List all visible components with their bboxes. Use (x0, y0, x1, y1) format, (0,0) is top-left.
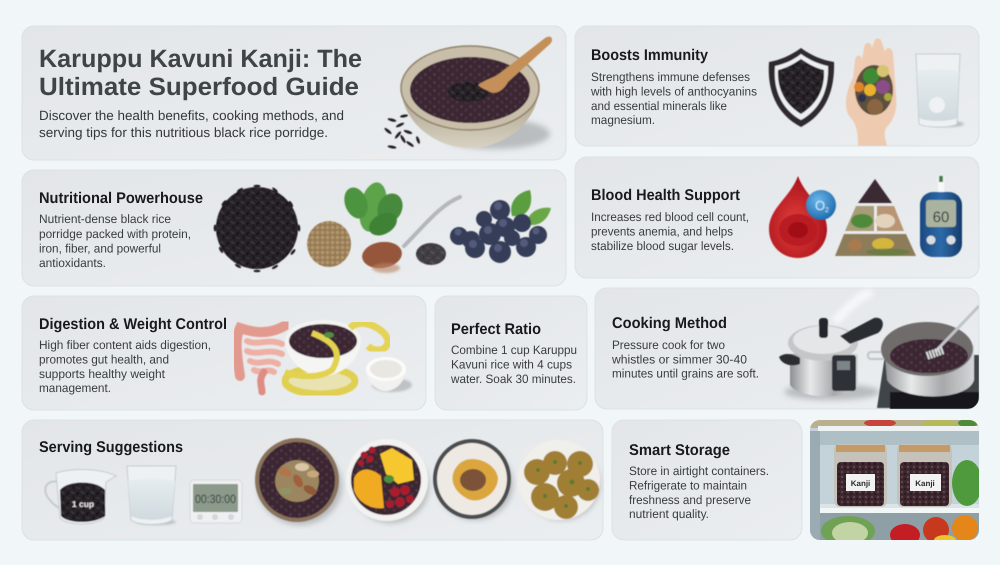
icon: bowl with mango and pomegranate (346, 439, 429, 523)
icon: oxygen bubble: 2 (825, 207, 829, 214)
icon: pressure cooker (779, 292, 883, 400)
icon: glass of water (127, 466, 176, 525)
body text: minutes until grains are soft. (612, 366, 759, 380)
body text (611, 338, 759, 380)
body text (39, 212, 191, 270)
body text (450, 343, 577, 386)
body text (591, 210, 749, 253)
icon: rice shield (769, 48, 834, 127)
body text: Combine 1 cup Karuppu (451, 343, 577, 357)
icon: left kanji jar (834, 444, 887, 507)
body text: Kavuni rice with 4 cups (451, 358, 572, 372)
heading: Digestion & Weight Control (39, 316, 227, 333)
body text: iron, fiber, and powerful (39, 242, 161, 256)
heading: Blood Health Support (591, 187, 740, 204)
title: Karuppu Kavuni Kanji: The (39, 45, 362, 73)
icon: hand holding foods (846, 38, 896, 146)
icon: oxygen bubble: O (815, 198, 825, 213)
icon: digital timer (190, 480, 242, 523)
icon: measuring cup with rice (45, 470, 116, 524)
panel: serving suggestions (22, 420, 603, 540)
panel: perfect ratio (435, 296, 587, 410)
panel: blood health support (575, 157, 979, 278)
icon: plate of patties (518, 440, 600, 520)
heading: Serving Suggestions (39, 439, 183, 456)
icon: intestines (237, 325, 286, 392)
body text: whistles or simmer 30-40 (611, 352, 747, 366)
title: Ultimate Superfood Guide (39, 73, 359, 101)
body text: Strengthens immune defenses (591, 70, 750, 84)
icon: black rice pile (214, 185, 301, 272)
title (39, 45, 362, 101)
heading: Boosts Immunity (591, 47, 708, 64)
panel: hero title (22, 26, 566, 160)
body text: nutrient quality. (629, 507, 709, 521)
body text (629, 464, 769, 521)
body text (590, 70, 757, 127)
icon: right kanji jar: Kanji (915, 479, 935, 488)
subtitle (39, 108, 344, 140)
body text: prevents anemia, and helps (591, 224, 733, 238)
body text: High fiber content aids digestion, (39, 338, 211, 352)
icon: spoon of powder (360, 197, 460, 273)
body text: antioxidants. (39, 256, 106, 270)
photo: refrigerator with kanji jars (810, 419, 982, 546)
icon: blood drop (769, 176, 827, 258)
icon: seeds pile (307, 221, 351, 267)
heading: Perfect Ratio (451, 321, 541, 338)
icon: lettuce (952, 460, 982, 506)
icon: right kanji jar (897, 444, 952, 507)
icon: food pyramid (835, 179, 916, 256)
icon: tape measure coil (350, 323, 388, 350)
icon: vegetables on bottom shelf (821, 515, 978, 540)
icon: digital timer: 00:30:00 (195, 492, 236, 506)
icon: simmering pot on stove (868, 306, 979, 409)
body text: with high levels of anthocyanins (590, 84, 757, 98)
icon: bowl with nuts (255, 438, 342, 525)
panel: cooking method (595, 288, 979, 409)
icon: bowl of rice pudding with honey (433, 439, 513, 520)
body text: and essential minerals like (591, 99, 727, 113)
heading: Cooking Method (612, 315, 727, 332)
body text: Pressure cook for two (612, 338, 725, 352)
body text: Store in airtight containers. (629, 464, 769, 478)
heading: Smart Storage (629, 442, 730, 459)
body text: magnesium. (591, 113, 655, 127)
body text: Increases red blood cell count, (591, 210, 749, 224)
subtitle: Discover the health benefits, cooking methods, and (39, 108, 344, 123)
icon: left kanji jar: Kanji (851, 479, 870, 488)
panel: digestion and weight control (22, 296, 426, 410)
heading: Nutritional Powerhouse (39, 190, 203, 207)
icon: porridge bowl with tape (285, 320, 361, 376)
body text (39, 338, 211, 395)
body text: Nutrient-dense black rice (39, 212, 171, 226)
icon: glass of water with tablet (916, 54, 964, 127)
icon: oxygen bubble (806, 190, 836, 220)
body text: promotes gut health, and (39, 352, 169, 366)
panel: boosts immunity (575, 26, 979, 146)
icon: measuring cup with rice: 1 cup (72, 499, 94, 509)
icon: bowl of black rice porridge (384, 37, 552, 149)
body text: stabilize blood sugar levels. (591, 239, 734, 253)
body text: freshness and preserve (629, 493, 751, 507)
icon: small bowl of white grains (366, 357, 412, 392)
body text: water. Soak 30 minutes. (450, 372, 576, 386)
icon: blueberries and leaves (450, 190, 551, 263)
panel: nutritional powerhouse (22, 170, 566, 286)
icon: spinach leaves (340, 180, 407, 240)
body text: supports healthy weight (39, 367, 166, 381)
body text: Refrigerate to maintain (629, 478, 747, 492)
body text: management. (39, 381, 111, 395)
icon: tape measure base (285, 368, 355, 394)
icon: glucose meter (920, 176, 962, 257)
icon: glucose meter: 60 (933, 209, 949, 226)
body text: porridge packed with protein, (39, 227, 191, 241)
subtitle: serving tips for this nutritious black rice porridge. (39, 125, 328, 140)
panel: smart storage (612, 420, 802, 540)
